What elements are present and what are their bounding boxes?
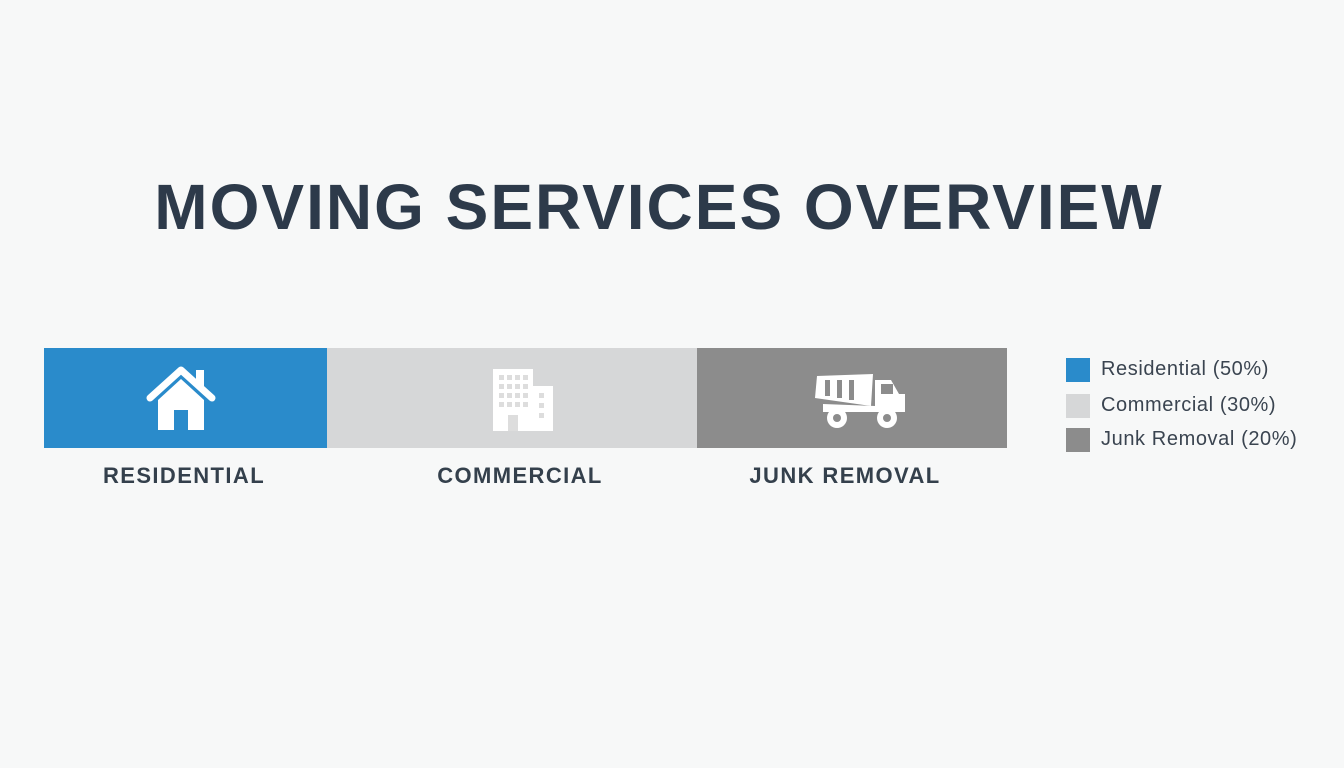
label: junk removal: JUNK REMOVAL [749, 463, 941, 488]
legend item commercial [1066, 394, 1276, 418]
segment: commercial [327, 348, 697, 448]
stacked bar [44, 348, 1007, 448]
segment: residential [44, 348, 327, 448]
label: residential: RESIDENTIAL [103, 463, 265, 488]
segment: junk removal [697, 348, 1007, 448]
icon: dump truck [815, 374, 905, 428]
title: MOVING SERVICES OVERVIEW [154, 171, 1164, 243]
legend: Junk Removal (20%) [1101, 428, 1297, 450]
legend item residential [1066, 358, 1269, 382]
label: commercial: COMMERCIAL [437, 463, 603, 488]
legend: Commercial (30%) [1101, 394, 1276, 416]
icon: house [146, 366, 216, 430]
legend: Residential (50%) [1101, 358, 1269, 380]
legend item junk removal [1066, 428, 1297, 452]
legend [1066, 358, 1297, 452]
icon: building [493, 369, 553, 431]
